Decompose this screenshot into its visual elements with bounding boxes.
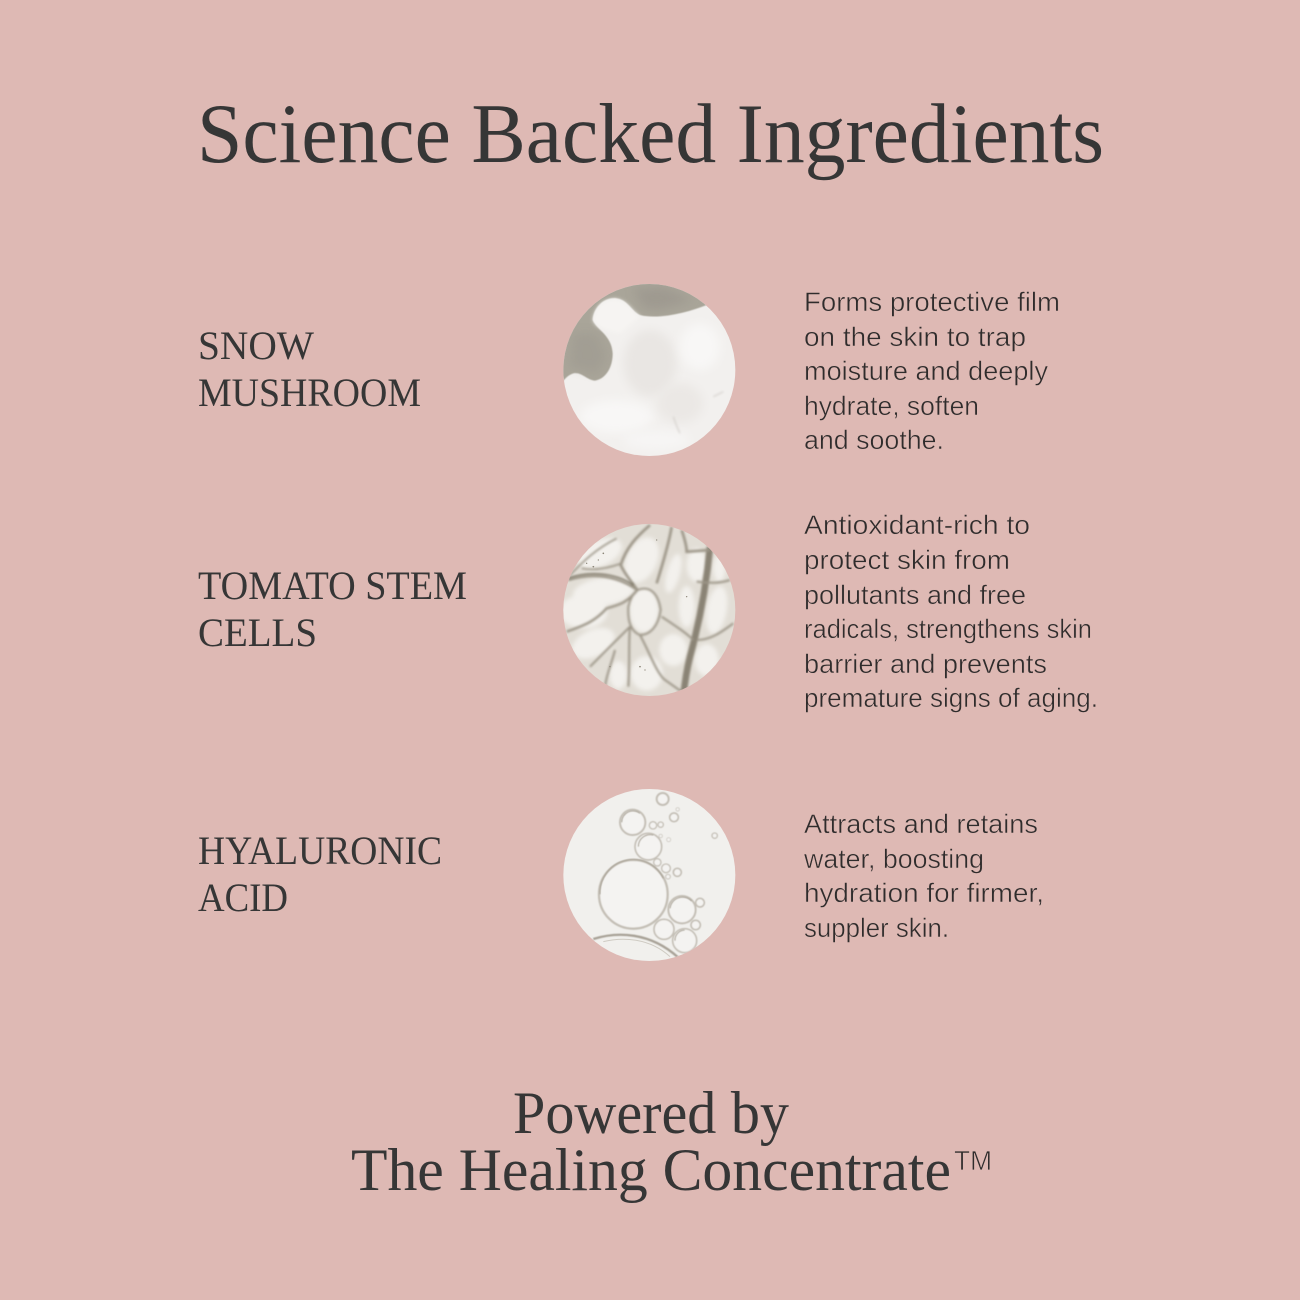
description: tomato stem cells	[804, 510, 1098, 713]
image: hyaluronic acid bubbles	[563, 789, 736, 961]
label: tomato stem cells: CELLS	[198, 610, 317, 655]
description: tomato stem cells: pollutants and free	[804, 580, 1026, 610]
description: hyaluronic acid	[803, 809, 1044, 943]
description: snow mushroom: and soothe.	[804, 425, 944, 455]
row: snow mushroom	[199, 284, 1058, 456]
description: snow mushroom: hydrate, soften	[804, 391, 979, 421]
row: hyaluronic acid	[198, 789, 1042, 961]
label: hyaluronic acid	[198, 828, 442, 920]
label: hyaluronic acid: ACID	[198, 875, 288, 920]
description: tomato stem cells: barrier and prevents	[804, 649, 1047, 679]
description: hyaluronic acid: hydration for firmer,	[804, 878, 1044, 908]
description: hyaluronic acid: suppler skin.	[804, 913, 949, 943]
footer heading: The Healing Concentrate	[351, 1137, 951, 1203]
description: snow mushroom	[804, 287, 1060, 455]
footer heading	[351, 1080, 992, 1203]
label: snow mushroom	[198, 323, 421, 415]
description: tomato stem cells: premature signs of aging.	[804, 683, 1098, 713]
infographic canvas	[198, 103, 1102, 1203]
title: Science Backed Ingredients	[197, 87, 1104, 181]
image: tomato stem cell texture	[563, 524, 736, 696]
description: tomato stem cells: protect skin from	[804, 545, 1010, 575]
label: tomato stem cells: TOMATO STEM	[198, 563, 467, 608]
description: tomato stem cells: Antioxidant-rich to	[804, 510, 1030, 540]
description: snow mushroom: on the skin to trap	[804, 322, 1026, 352]
label: snow mushroom: MUSHROOM	[198, 370, 421, 415]
footer heading: TM	[954, 1145, 992, 1176]
description: tomato stem cells: radicals, strengthens skin	[804, 614, 1092, 644]
label: hyaluronic acid: HYALURONIC	[198, 828, 442, 873]
description: hyaluronic acid: Attracts and retains	[804, 809, 1038, 839]
description: snow mushroom: Forms protective film	[804, 287, 1060, 317]
label: tomato stem cells	[198, 563, 467, 655]
description: snow mushroom: moisture and deeply	[804, 356, 1048, 386]
image: snow mushroom texture	[563, 284, 736, 456]
label: snow mushroom: SNOW	[198, 323, 314, 368]
description: hyaluronic acid: water, boosting	[803, 844, 984, 874]
footer heading: Powered by	[513, 1080, 789, 1146]
row: tomato stem cells	[198, 510, 1098, 713]
